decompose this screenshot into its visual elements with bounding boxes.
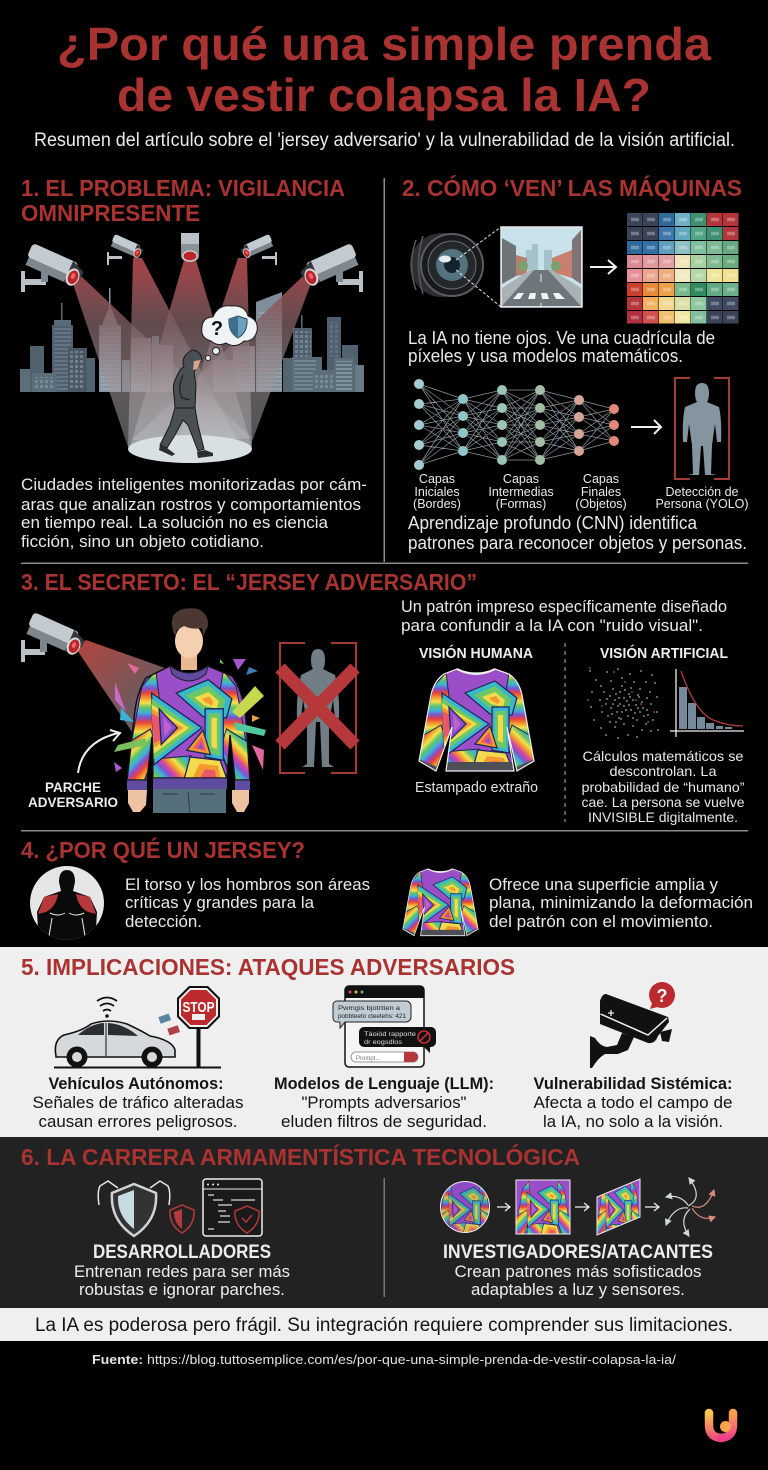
arrow: [590, 260, 616, 274]
icon: street picture: [456, 227, 582, 307]
text: surveillance summary: en tiempo real. La solución no es ciencia: [21, 513, 329, 532]
panel: 5 implicaciones: [0, 947, 768, 1137]
city skyline: [20, 288, 364, 392]
text: language models: Modelos de Lenguaje (LLM):: [274, 1075, 494, 1093]
text: researchers and attackers: Crean patrones más sofisticados: [454, 1262, 702, 1281]
heading: section 2: 2. CÓMO ‘VEN’ LAS MÁQUINAS: [402, 174, 742, 201]
text: language models: "Prompts adversarios": [302, 1094, 467, 1112]
icon: autonomous car and stop sign: STOP: [182, 999, 214, 1016]
labels: network layers: Iniciales: [414, 485, 460, 499]
subpanel: vision artificial: VISIÓN ARTIFICIAL: [600, 644, 728, 662]
labels: network layers: (Formas): [496, 497, 546, 511]
labels: network layers: Intermedias: [488, 485, 554, 499]
heading: section 1: 1. EL PROBLEMA: VIGILANCIA: [21, 175, 345, 201]
icon: chat window: Prompt...: [356, 1056, 381, 1062]
subpanel: vision artificial: [582, 644, 745, 825]
labels: network layers: [413, 472, 749, 511]
text: researchers and attackers: [443, 1242, 713, 1299]
text: deep learning explanation: [408, 513, 747, 553]
icon: detected person: [675, 378, 729, 479]
icon: evolving adversarial patterns: [436, 1175, 715, 1240]
text: torso explanation: El torso y los hombros son áreas: [125, 875, 370, 894]
panel: 2 como ven las maquinas: [402, 174, 749, 553]
icon: torso target: [30, 866, 104, 945]
labels: network layers: Detección de: [666, 485, 739, 499]
spotlight floor: [128, 435, 252, 463]
icon: shields: [98, 1181, 194, 1236]
panel: 1 el problema: [20, 175, 367, 551]
icon: black camera with question: ?: [656, 986, 668, 1006]
text: surface explanation: Ofrece una superficie amplia y: [489, 875, 718, 894]
icon: chat window: pobbteeto cteetehs: 421: [338, 1013, 406, 1020]
icon: logo: [709, 1413, 733, 1438]
text: deep learning explanation: Aprendizaje profundo (CNN) identifica: [408, 513, 698, 533]
label: parche adversario: ADVERSARIO: [28, 794, 118, 810]
text: language models: eluden filtros de seguridad.: [281, 1113, 487, 1131]
text: torso explanation: detección.: [125, 912, 202, 931]
text: systemic vulnerability: [534, 1075, 732, 1131]
conclusion band: La IA es poderosa pero frágil. Su integración requiere comprender sus limitaciones.: [35, 1315, 733, 1336]
panel: 4 por que un jersey: [21, 836, 753, 945]
text: autonomous vehicles: Señales de tráfico alteradas: [32, 1094, 244, 1112]
title: [57, 18, 711, 121]
labels: network layers: Capas: [419, 472, 455, 486]
icon: chat window: [333, 986, 436, 1067]
label: parche adversario: [28, 779, 118, 810]
text: surface explanation: del patrón con el movimiento.: [489, 912, 713, 931]
text: deep learning explanation: patrones para reconocer objetos y personas.: [408, 533, 747, 553]
icon: camera lens: [410, 233, 483, 297]
heading: section 3: 3. EL SECRETO: EL “JERSEY ADVERSARIO”: [21, 569, 477, 595]
icon: autonomous car and stop sign: [54, 986, 221, 1068]
subpanel: vision humana: Estampado extraño: [415, 780, 538, 796]
figure: hooded person walking: [159, 350, 213, 458]
icon: thought bubble with question and shield: ?: [211, 318, 223, 340]
text: researchers and attackers: INVESTIGADORES/ATACANTES: [443, 1242, 713, 1263]
title: ¿Por qué una simple prenda: [57, 18, 711, 70]
labels: network layers: Persona (YOLO): [655, 497, 749, 511]
label: parche adversario: PARCHE: [45, 779, 101, 795]
text: surface explanation: [489, 875, 753, 931]
figure: man wearing adversarial jersey: [122, 608, 255, 813]
text: systemic vulnerability: la IA, no solo a la visión.: [543, 1113, 723, 1131]
arrow: [631, 420, 661, 434]
text: torso explanation: críticas y grandes para la: [125, 893, 315, 912]
chart: noise scatter: [588, 668, 658, 738]
icon: chat window: Pwmgis bjotrtten a: [338, 1005, 400, 1012]
text: developers: [74, 1242, 290, 1299]
text: mathematical breakdown: [582, 748, 745, 825]
icon: surveillance cameras: [21, 233, 363, 292]
labels: network layers: (Bordes): [413, 497, 461, 511]
labels: network layers: Finales: [581, 485, 621, 499]
text: mathematical breakdown: cae. La persona se vuelve: [582, 794, 745, 810]
icon: undetected person crossed out: [280, 643, 356, 773]
arrow: patch pointer: [78, 730, 120, 773]
light beams: [71, 258, 313, 447]
text: mathematical breakdown: probabilidad de “humano”: [582, 779, 745, 795]
text: printed pattern description: Un patrón impreso específicamente diseñado: [401, 597, 727, 616]
heading: section 4: 4. ¿POR QUÉ UN JERSEY?: [21, 836, 305, 863]
labels: network layers: (Objetos): [575, 497, 627, 511]
source line: Fuente: https://blog.tuttosemplice.com/es/por-que-una-simple-prenda-de-vestir-colapsa-la-ia/: [92, 1353, 677, 1367]
pixel value grid: [627, 213, 739, 324]
camera beam: [75, 640, 165, 732]
subpanel: vision humana: [414, 644, 539, 796]
glitch shards: [114, 659, 266, 772]
text: autonomous vehicles: causan errores peligrosos.: [38, 1113, 238, 1131]
icon: camera: [21, 612, 87, 662]
text: autonomous vehicles: Vehículos Autónomos:: [48, 1075, 224, 1093]
heading: section 1: OMNIPRESENTE: [21, 200, 200, 226]
text: surveillance summary: [21, 475, 367, 551]
text: surveillance summary: aras que analizan rostros y comportamientos: [21, 495, 361, 514]
conclusion band: [0, 1308, 768, 1341]
icon: chat window: dr eogsdlos: [364, 1039, 403, 1046]
subtitle: Resumen del artículo sobre el 'jersey adversario' y la vulnerabilidad de la visión artificial.: [34, 130, 735, 151]
chart: falling probability bars: [670, 669, 744, 737]
subpanel: vision humana: VISIÓN HUMANA: [419, 644, 534, 662]
text: printed pattern description: [401, 597, 727, 635]
heading: section 6: 6. LA CARRERA ARMAMENTÍSTICA TECNOLÓGICA: [21, 1143, 580, 1170]
labels: network layers: Capas: [503, 472, 539, 486]
text: surface explanation: plana, minimizando la deformación: [489, 893, 753, 912]
icon: chat window: Tàoiód rapporte: [364, 1031, 416, 1038]
text: printed pattern description: para confundir a la IA con "ruido visual".: [401, 616, 703, 635]
heading: section 1: [21, 175, 345, 226]
text: surveillance summary: ficción, sino un objeto cotidiano.: [21, 532, 264, 551]
text: language models: [274, 1075, 494, 1131]
text: mathematical breakdown: Cálculos matemáticos se: [582, 748, 744, 764]
text: researchers and attackers: adaptables a luz y sensores.: [471, 1280, 685, 1299]
text: mathematical breakdown: INVISIBLE digitalmente.: [588, 809, 738, 825]
text: developers: robustas e ignorar parches.: [79, 1280, 285, 1299]
panel: 3 el secreto: [21, 569, 745, 825]
icon: code window: [203, 1179, 262, 1236]
icon: black camera with question: [590, 982, 675, 1068]
labels: network layers: Capas: [583, 472, 619, 486]
text: pixel grid explanation: píxeles y usa modelos matemáticos.: [408, 346, 683, 366]
heading: section 5: 5. IMPLICACIONES: ATAQUES ADVERSARIOS: [21, 954, 515, 980]
text: developers: Entrenan redes para ser más: [74, 1262, 290, 1281]
text: autonomous vehicles: [32, 1075, 244, 1131]
chart: neural network: [414, 379, 619, 470]
text: mathematical breakdown: descontrolan. La: [610, 763, 717, 779]
panel: 6 carrera armamentistica: [0, 1137, 768, 1308]
text: surveillance summary: Ciudades inteligentes monitorizadas por cám-: [21, 475, 367, 494]
text: pixel grid explanation: [408, 328, 715, 366]
title: de vestir colapsa la IA?: [117, 69, 651, 121]
text: torso explanation: [125, 875, 370, 931]
icon: small jersey: [400, 864, 481, 940]
text: pixel grid explanation: La IA no tiene ojos. Ve una cuadrícula de: [408, 328, 715, 348]
text: systemic vulnerability: Afecta a todo el campo de: [534, 1094, 732, 1112]
text: systemic vulnerability: Vulnerabilidad Sistémica:: [534, 1075, 732, 1093]
icon: thought bubble with question and shield: [202, 306, 257, 360]
text: developers: DESARROLLADORES: [93, 1242, 271, 1263]
